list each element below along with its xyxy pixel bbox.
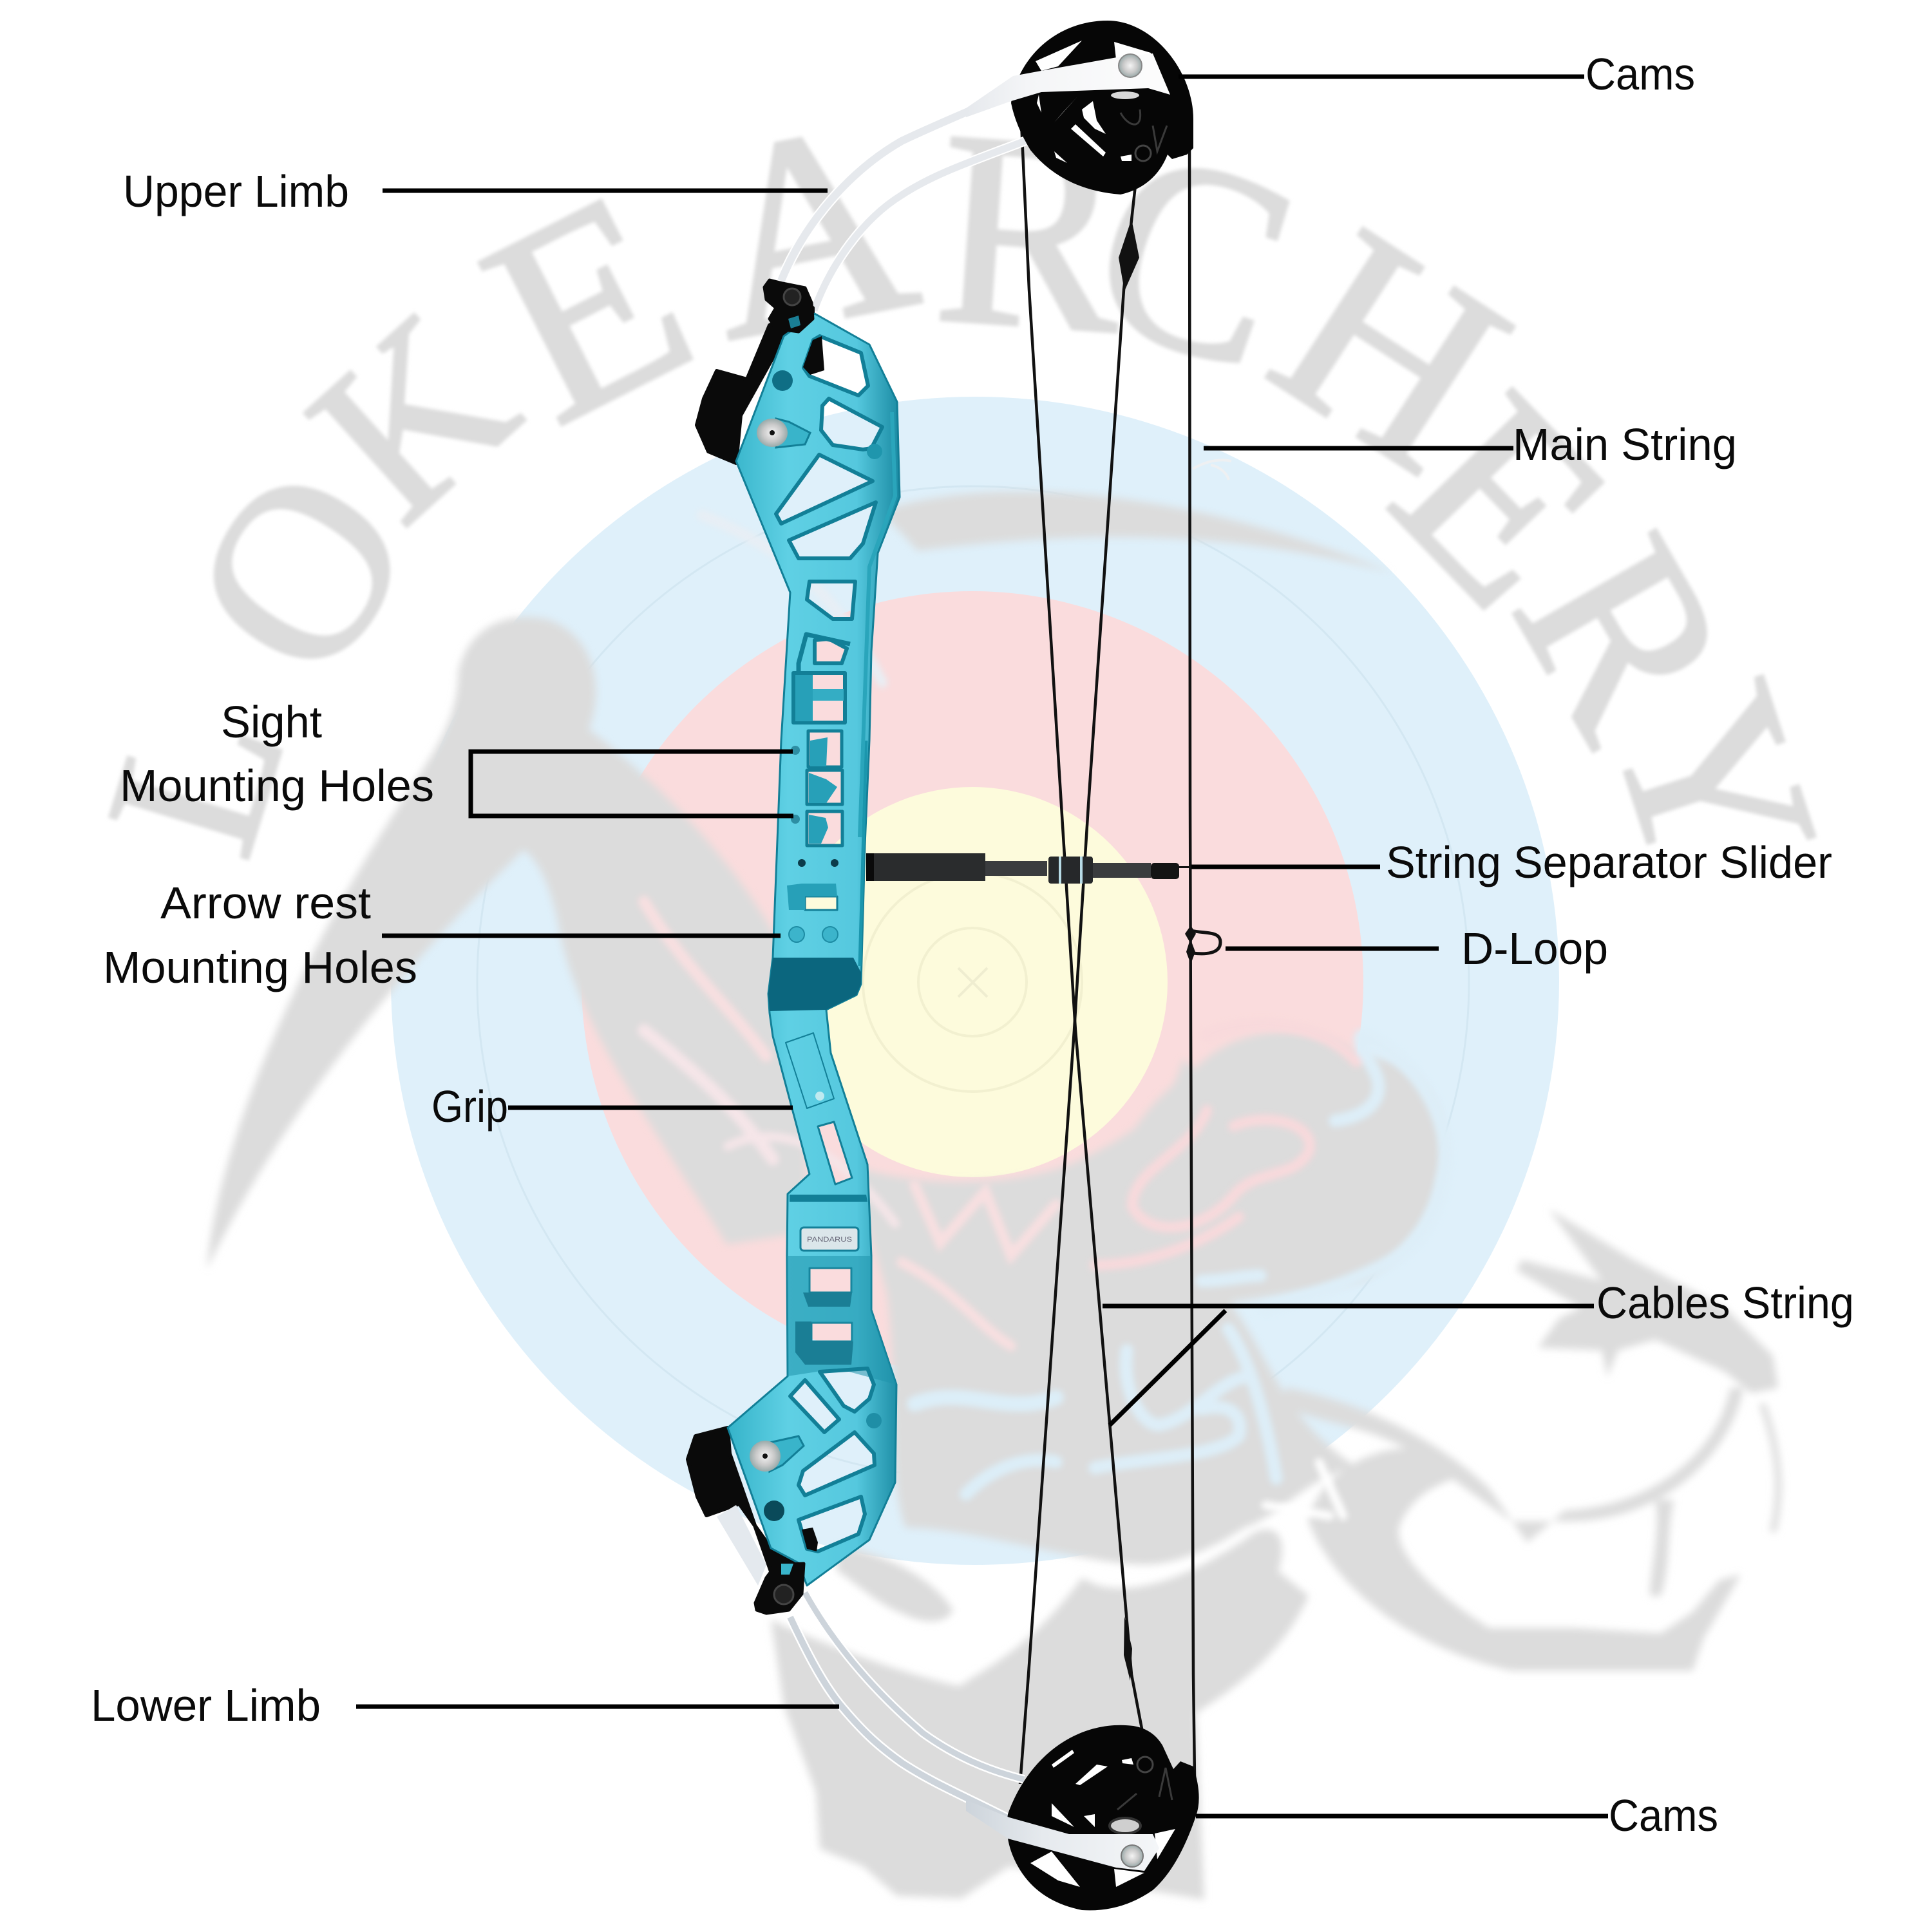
watermark lettering: LOKE ARCHERY: R xyxy=(928,73,1135,392)
dark lower frames of grip windows xyxy=(795,1293,853,1365)
lower black limb pocket xyxy=(688,1428,799,1571)
inner teal fill inside rectangular windows xyxy=(787,675,844,910)
d-loop xyxy=(1185,925,1220,964)
dark shelf block xyxy=(768,958,861,1011)
label: cables string: Cables String xyxy=(1596,1278,1854,1328)
watermark lettering: LOKE ARCHERY: A xyxy=(680,60,935,399)
watermark lettering: LOKE ARCHERY: Y xyxy=(1558,656,1871,908)
label: cams bottom: Cams xyxy=(1609,1790,1718,1841)
bottom limb tip xyxy=(966,1800,1159,1871)
logo: upper arc xyxy=(881,491,1392,573)
label: sight: Sight xyxy=(221,697,322,747)
upper black limb pocket xyxy=(697,308,813,463)
lower bolt xyxy=(750,1436,804,1472)
top cam xyxy=(966,21,1193,194)
upper limb: inner arc xyxy=(814,140,1027,310)
lower limb: inner arc xyxy=(805,1593,1024,1779)
leader: string separator xyxy=(1191,864,1380,869)
label: mounting holes 2: Mounting Holes xyxy=(103,942,417,992)
riser xyxy=(688,280,900,1613)
leader: d-loop xyxy=(1226,947,1439,951)
main string serving mark xyxy=(1193,460,1231,480)
leader: cables string xyxy=(1103,1306,1594,1425)
top axle bolt xyxy=(1119,54,1142,77)
label: grip: Grip xyxy=(431,1081,508,1132)
swirl: blue lines in right blob xyxy=(1095,1036,1445,1479)
bottom cam xyxy=(966,1725,1199,1910)
upper bolt xyxy=(757,419,810,448)
shading: teal inner frames of window rims xyxy=(776,336,895,1551)
shading: darker lower column xyxy=(787,1256,896,1385)
label: lower limb: Lower Limb xyxy=(91,1680,321,1730)
logo: centre body xyxy=(850,1059,1355,1565)
lower limb: outer arc xyxy=(790,1617,1011,1820)
leader: sight mounting bracket xyxy=(471,752,793,816)
cable spindle: lower xyxy=(1124,1616,1132,1681)
black lump inside lower window xyxy=(802,1528,818,1551)
watermark lettering: LOKE ARCHERY: H xyxy=(1228,171,1555,529)
leader: bottom cams xyxy=(1196,1814,1608,1819)
label: arrow rest: Arrow rest xyxy=(160,878,371,928)
leader: top cams xyxy=(1179,75,1584,79)
watermark lettering: LOKE ARCHERY: O xyxy=(137,421,464,721)
leader: lower limb xyxy=(356,1704,839,1709)
logo: bottom mass xyxy=(771,1530,1309,1900)
label plate xyxy=(800,1227,858,1251)
label: string separator slider: String Separator Slider xyxy=(1386,837,1832,887)
logo: lobe under riser xyxy=(837,1546,953,1622)
watermark lettering: LOKE ARCHERY: E xyxy=(443,132,733,482)
dark ledge above label plate xyxy=(790,1195,867,1202)
label: main string: Main String xyxy=(1513,419,1737,469)
riser body xyxy=(728,314,900,1586)
watermark logo: archer and dragon xyxy=(207,491,1778,1900)
top limb tip xyxy=(966,53,1170,117)
watermark lettering: LOKE ARCHERY: E xyxy=(1341,340,1663,659)
archery target background xyxy=(391,397,1559,1565)
upper limb: outer arc xyxy=(781,87,1024,281)
label: d-loop: D-Loop xyxy=(1461,923,1608,974)
lower limb knob xyxy=(755,1564,804,1613)
cable spindle: upper xyxy=(1119,219,1139,291)
label: mounting holes: Mounting Holes xyxy=(120,761,434,811)
watermark lettering: LOKE ARCHERY: K xyxy=(263,265,560,567)
leader lines xyxy=(356,77,1608,1816)
white streak across bottom mass xyxy=(971,1700,994,1855)
leader: main string xyxy=(1204,446,1513,451)
logo: blade and archer head xyxy=(207,617,807,1269)
cables string xyxy=(1020,122,1144,1784)
string separator slider xyxy=(866,853,1193,884)
watermark lettering: LOKE ARCHERY xyxy=(59,60,1871,908)
lower white limb strip xyxy=(717,1505,766,1586)
black lump inside upper window xyxy=(803,336,824,375)
watermark lettering: LOKE ARCHERY: C xyxy=(1062,86,1326,427)
riser mounting holes xyxy=(764,370,882,1521)
label plate: PANDARUS xyxy=(807,1236,852,1244)
upper limb knob xyxy=(764,280,813,332)
leader: upper limb xyxy=(383,188,828,193)
leader: grip xyxy=(508,1105,793,1110)
grip thumb button xyxy=(815,1092,824,1101)
bottom axle bolt xyxy=(1121,1845,1143,1867)
watermark lettering: LOKE ARCHERY: R xyxy=(1463,495,1788,780)
watermark lettering: LOKE ARCHERY: L xyxy=(59,679,330,878)
leader: arrow rest xyxy=(382,934,781,938)
swirl: white slashes under blob xyxy=(1265,1463,1343,1516)
label: upper limb: Upper Limb xyxy=(123,166,349,216)
main string xyxy=(1189,129,1195,1777)
swirl: pink lines in right blob xyxy=(1095,1025,1356,1265)
label: cams top: Cams xyxy=(1586,49,1695,99)
watermark swirl highlights xyxy=(644,515,1445,1516)
logo: right blob and dragon head xyxy=(1095,1032,1778,1671)
